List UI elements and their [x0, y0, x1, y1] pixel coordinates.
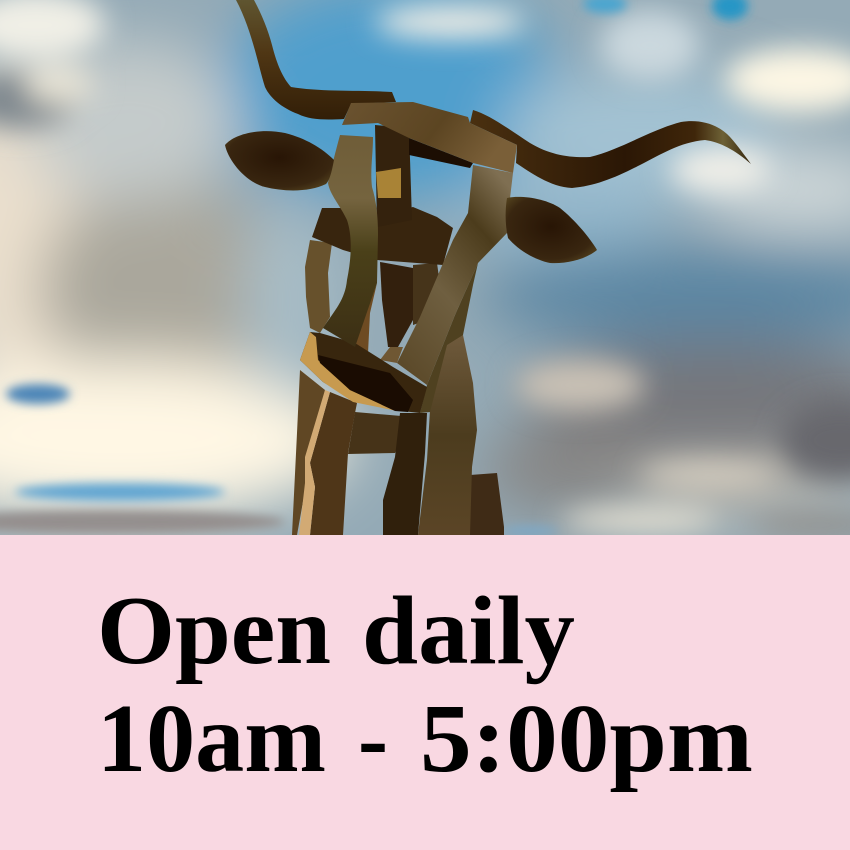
icon: left ear [225, 131, 334, 190]
heading: open daily [97, 577, 575, 684]
chest block [300, 332, 427, 413]
icon: right ear [506, 197, 597, 263]
front legs [292, 263, 478, 535]
back structure [305, 207, 504, 535]
text: hours: - [358, 685, 388, 792]
text: hours [97, 685, 753, 792]
heading: open daily: Open [97, 577, 331, 684]
icon: right horn [470, 110, 751, 188]
text: hours: 5:00pm [420, 685, 753, 792]
right post [397, 165, 513, 385]
icon: left horn [236, 0, 396, 119]
text: hours: 10am [97, 685, 326, 792]
head beam [342, 102, 517, 173]
under-beam shadow [409, 138, 473, 168]
left post [323, 135, 378, 347]
heading: open daily: daily [362, 577, 575, 684]
sculpture: wooden bull [225, 0, 751, 535]
panel: opening hours [0, 535, 850, 850]
photo: sky with clouds [0, 0, 850, 536]
center post [375, 125, 412, 215]
